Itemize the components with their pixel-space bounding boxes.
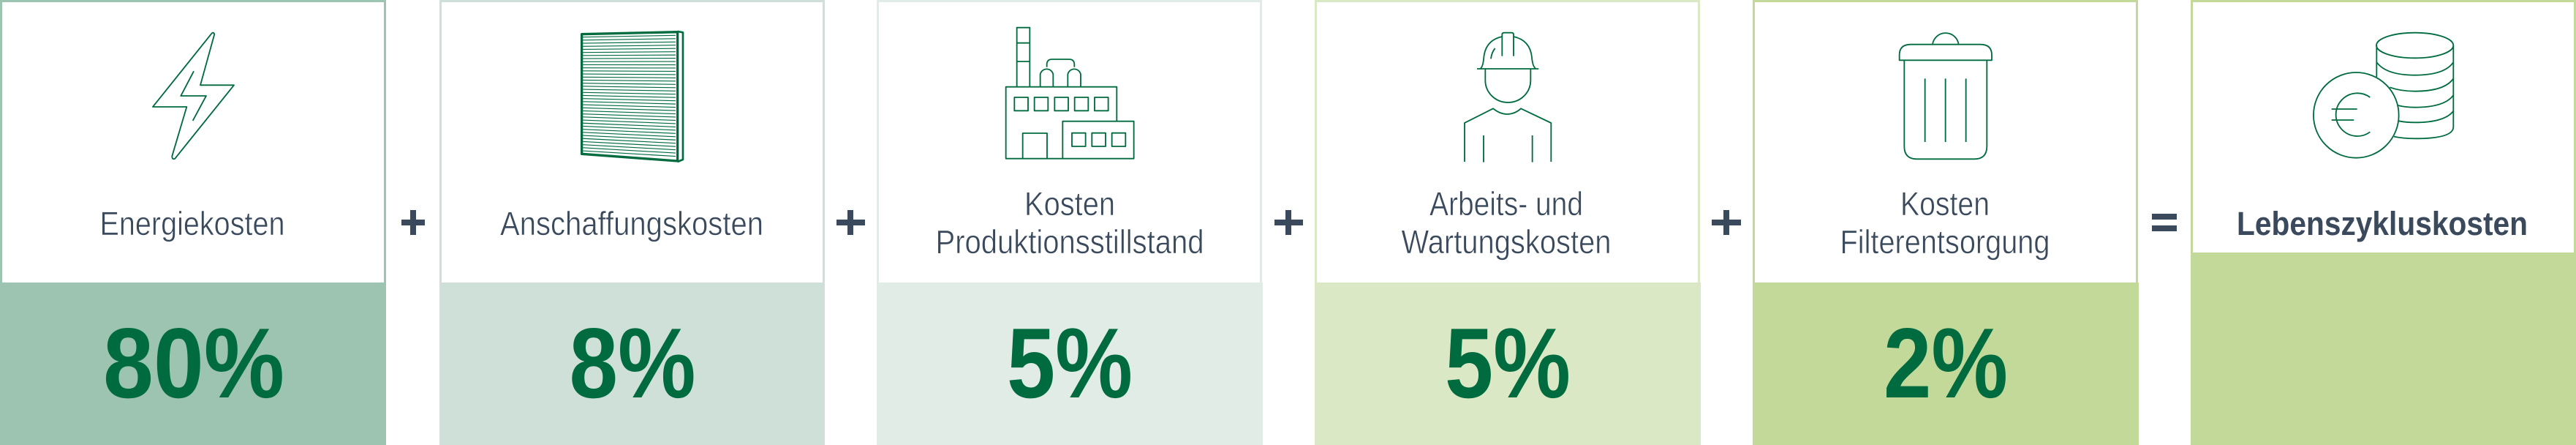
label: Kosten Filterentsorgung: Kosten: [1900, 185, 1990, 222]
panel: Anschaffungskosten: [439, 1, 825, 445]
value: 80%: 80%: [103, 307, 284, 419]
label: Lebenszykluskosten: Lebenszykluskosten: [2237, 205, 2528, 242]
label: Kosten Filterentsorgung: [1840, 185, 2050, 261]
label: Arbeits- und Wartungskosten: Arbeits- und: [1429, 185, 1583, 222]
value: 8%: 8%: [569, 307, 696, 419]
label: Arbeits- und Wartungskosten: Wartungskosten: [1401, 223, 1612, 261]
label: Kosten Produktionsstillstand: [936, 185, 1204, 261]
label: Kosten Produktionsstillstand: Produktionsstillstand: [936, 223, 1204, 261]
label: Arbeits- und Wartungskosten: [1401, 185, 1612, 261]
label: Kosten Produktionsstillstand: Kosten: [1024, 185, 1115, 222]
plus sign 4: [1712, 210, 1741, 235]
plus sign 1: [401, 210, 425, 235]
icon: worker with hard hat: [1465, 33, 1551, 162]
label: Anschaffungskosten: Anschaffungskosten: [500, 205, 763, 242]
icon: factory: [1006, 28, 1134, 159]
panel: Arbeits- und Wartungskosten: [1315, 1, 1701, 445]
panel: Energiekosten: [0, 1, 386, 445]
panel: Kosten Produktionsstillstand: [877, 1, 1263, 445]
value: 2%: 2%: [1884, 307, 2008, 419]
icon: coins with euro: [2314, 33, 2453, 158]
icon: trash bin: [1900, 33, 1992, 159]
label: Kosten Filterentsorgung: Filterentsorgung: [1840, 223, 2050, 261]
equals sign: [2152, 214, 2177, 231]
plus sign 3: [1274, 210, 1303, 235]
value: 5%: 5%: [1445, 307, 1571, 419]
icon: air filter: [582, 31, 683, 162]
value: 5%: 5%: [1007, 307, 1133, 419]
plus sign 2: [836, 210, 865, 235]
label: Energiekosten: Energiekosten: [99, 205, 285, 242]
panel: Kosten Filterentsorgung: [1753, 1, 2139, 445]
panel: Lebenszykluskosten: [2191, 1, 2576, 445]
icon: lightning bolt: [153, 33, 234, 159]
